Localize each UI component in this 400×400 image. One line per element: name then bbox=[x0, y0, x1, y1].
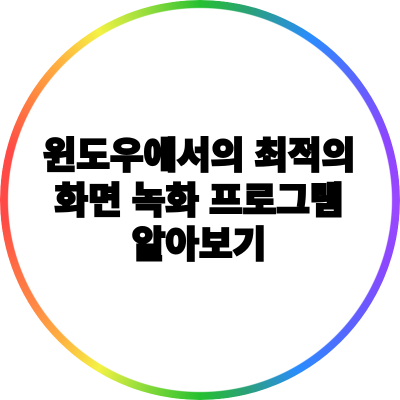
title: 알아보기 bbox=[132, 224, 266, 265]
title bbox=[43, 135, 355, 265]
title: 윈도우에서의 최적의 bbox=[43, 135, 355, 176]
title: 화면 녹화 프로그램 bbox=[55, 180, 343, 220]
